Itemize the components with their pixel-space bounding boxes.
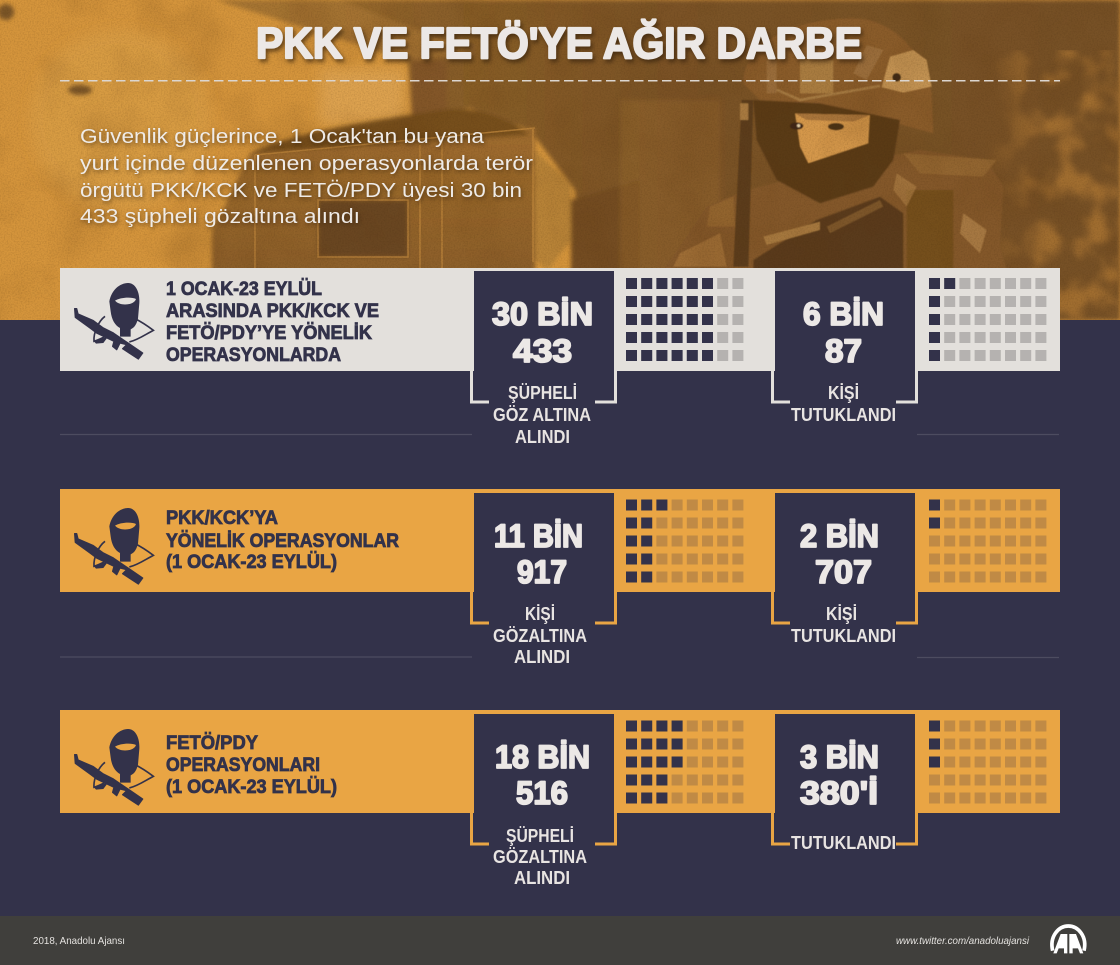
heading: PKK/KCK’YA [166,507,278,529]
stat box: arrested [772,714,916,853]
heading: OPERASYONLARI [166,754,320,776]
stat box: arrested [772,493,916,646]
stat box: detained: KİŞİ [525,604,555,624]
intro paragraph: Güvenlik güçlerince, 1 Ocak'tan bu yana [80,125,485,148]
stat box: detained: 516 [516,775,568,811]
stat box: arrested: 3 BİN [800,739,879,775]
stat box: arrested: 380'İ [800,775,878,811]
stat box: detained: GÖZALTINA [493,847,587,867]
stat box: detained: 11 BİN [494,518,583,554]
intro paragraph: örgütü PKK/KCK ve FETÖ/PDY üyesi 30 bin [80,179,522,202]
footer [0,916,1120,965]
stat box: detained [472,271,616,447]
stat box: detained: 30 BİN [492,296,593,332]
heading: ARASINDA PKK/KCK VE [166,300,379,322]
stat box: detained: GÖZALTINA [493,626,587,646]
stat box: arrested: KİŞİ [828,383,859,403]
square chart: arrested [929,284,1047,356]
heading [166,507,399,573]
stat box: detained: ALINDI [515,427,570,447]
stat box: detained: ALINDI [514,647,570,667]
square chart: detained [626,505,744,577]
stat box: arrested: 2 BİN [800,518,879,554]
icon: masked gunman [75,729,153,805]
intro paragraph: yurt içinde düzenlenen operasyonlarda terör [80,152,533,175]
intro paragraph [80,125,533,228]
icon: masked gunman [75,508,153,584]
heading: (1 OCAK-23 EYLÜL) [166,550,337,573]
title: PKK VE FETÖ'YE AĞIR DARBE [256,18,862,68]
stat box: detained [472,714,616,888]
heading: 1 OCAK-23 EYLÜL [166,277,322,300]
stat box: detained: ŞÜPHELİ [508,383,577,403]
band [60,268,1060,371]
heading: (1 OCAK-23 EYLÜL) [166,775,337,798]
stat box: arrested: 707 [815,554,872,590]
stat box: detained: 917 [517,554,567,590]
heading: FETÖ/PDY [166,731,258,754]
band [60,489,1060,592]
stat box: detained: ALINDI [514,868,570,888]
stat box: detained: GÖZ ALTINA [493,405,591,425]
heading [166,731,337,798]
icon: AA logo [1052,926,1085,953]
panel: FETÖ/PDY operations [60,710,1060,888]
intro paragraph: 433 şüpheli gözaltına alındı [80,205,360,228]
credit: 2018, Anadolu Ajansı [33,935,125,947]
panel: all operations [60,268,1060,447]
band [60,710,1060,813]
heading: FETÖ/PDY’YE YÖNELİK [166,321,372,344]
stat box: detained: 18 BİN [495,739,590,775]
stat box: arrested [772,271,916,425]
stat box: detained: ŞÜPHELİ [506,826,574,846]
square chart: arrested [929,505,1047,577]
photo: soldier in orange duotone [0,0,1120,320]
stat box: detained: 433 [513,333,572,369]
square chart: arrested [929,726,1047,798]
square chart: detained [626,726,744,798]
stat box: arrested: 87 [825,333,862,369]
heading [166,277,379,366]
square chart: detained [626,284,744,356]
heading: OPERASYONLARDA [166,344,341,366]
stat box: arrested: KİŞİ [826,604,857,624]
stat box: arrested: TUTUKLANDI [791,626,896,646]
panel: PKK/KCK operations [60,489,1060,667]
icon: masked gunman [75,283,153,359]
stat box: arrested: 6 BİN [803,296,884,332]
social link: www.twitter.com/anadoluajansi [896,935,1030,947]
stat box: arrested: TUTUKLANDI [791,833,896,853]
dashed divider [60,80,1060,82]
stat box: arrested: TUTUKLANDI [791,405,896,425]
heading: YÖNELİK OPERASYONLAR [166,529,399,552]
stat box: detained [472,493,616,667]
